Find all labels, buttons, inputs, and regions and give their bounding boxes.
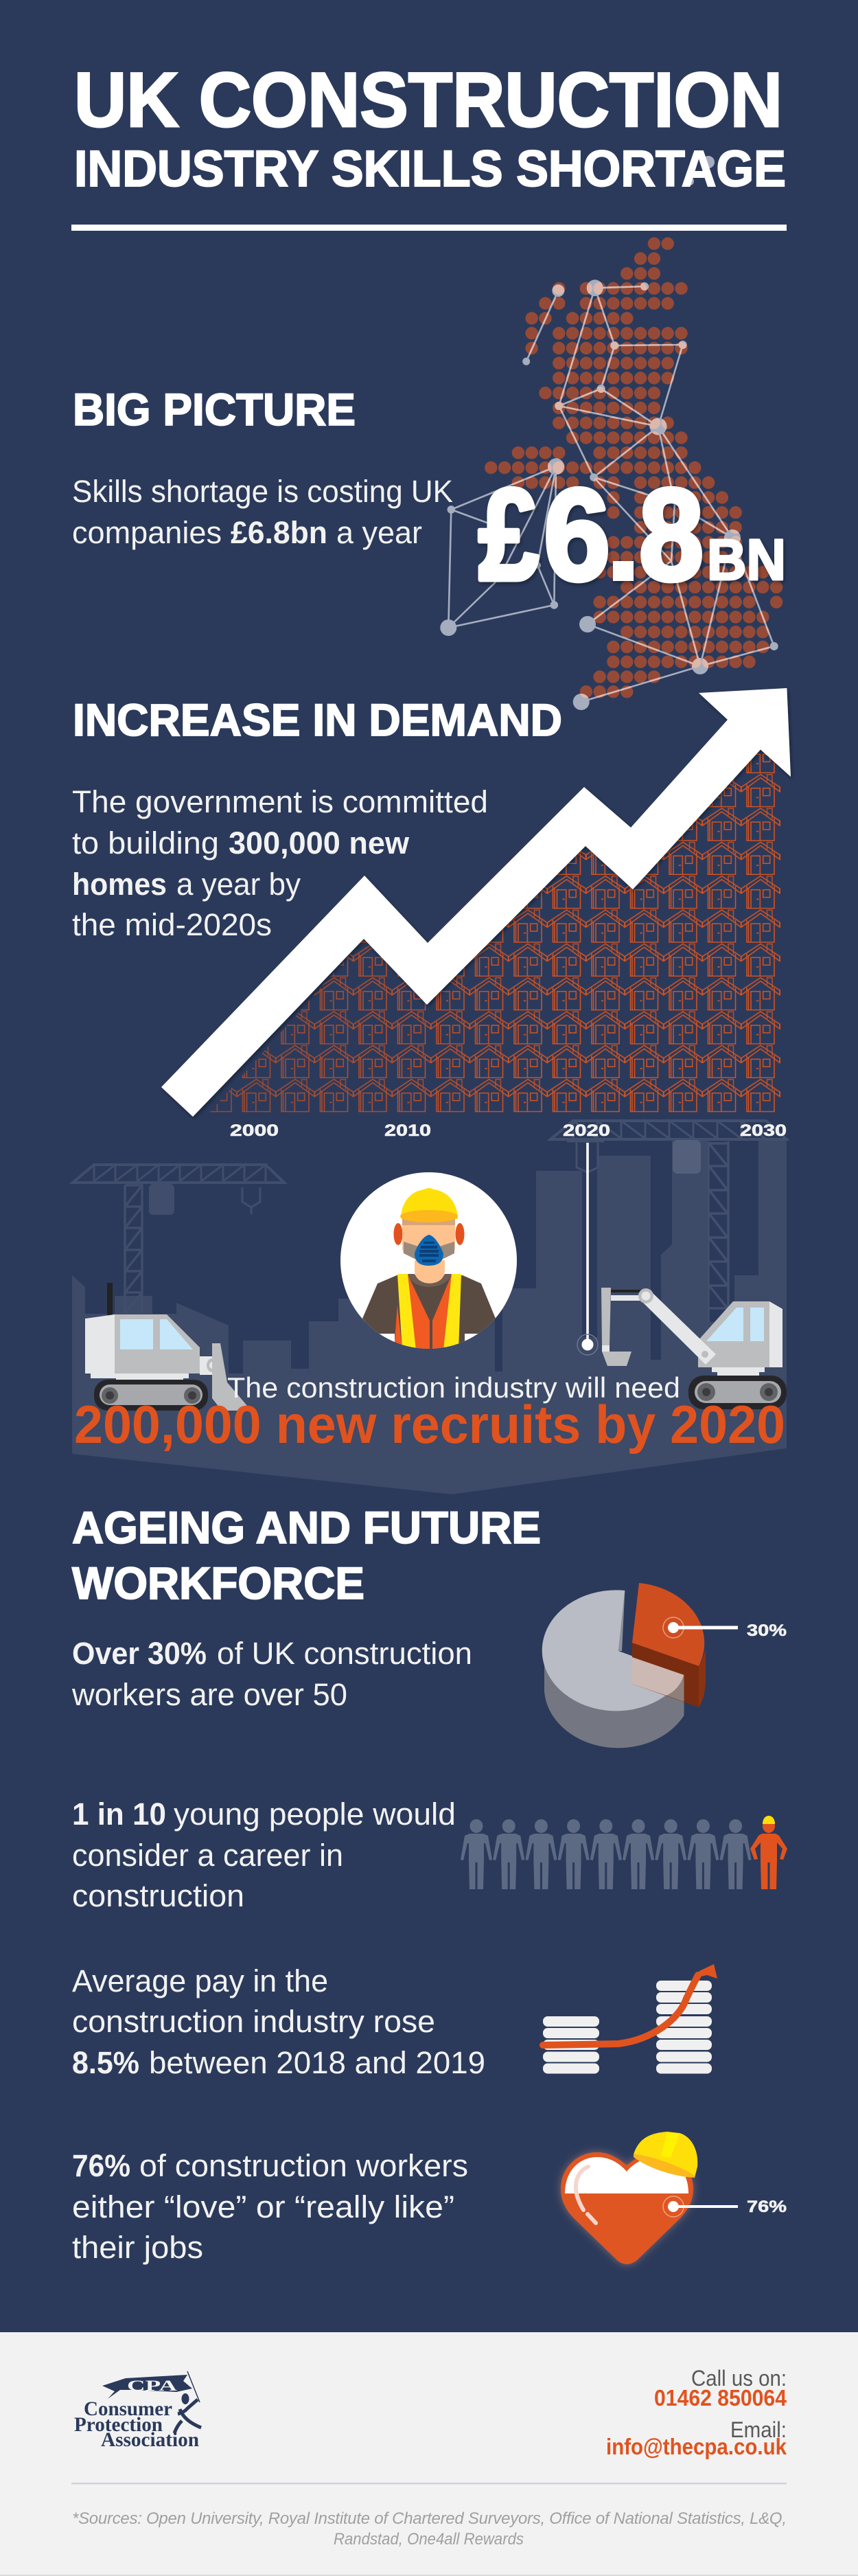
pie orange outer face	[699, 1641, 706, 1707]
rising arrow	[543, 1975, 698, 2045]
chart: houses pattern	[192, 742, 782, 1113]
marker and label	[663, 1617, 787, 1640]
marker and label: 76%	[747, 2198, 787, 2216]
logo: Consumer Protection Association: CPA	[127, 2377, 177, 2394]
logo: Consumer Protection Association	[74, 2371, 201, 2451]
year labels: 2010	[384, 1121, 431, 1140]
contact details: Call us on:	[691, 2366, 787, 2391]
mask	[415, 1235, 443, 1266]
text: over 30 percent	[71, 1636, 472, 1712]
pie side	[544, 1651, 684, 1748]
coin stack: right	[656, 1981, 712, 2074]
text: over 30 percent: Over 30%	[72, 1636, 207, 1671]
year labels: 2000	[230, 1121, 279, 1140]
heading: increase in demand: INCREASE IN DEMAND	[73, 694, 562, 745]
crane cable and ball	[577, 1143, 598, 1355]
year labels: 2020	[563, 1121, 610, 1140]
excavator	[601, 1288, 787, 1409]
text: 1 in 10: young people would	[174, 1797, 456, 1832]
helmet	[401, 1188, 458, 1219]
year labels: 2030	[740, 1121, 787, 1140]
callout text: recruits: 200,000 new recruits by 2020	[74, 1394, 785, 1455]
logo wordmark: Protection	[74, 2413, 163, 2436]
text: average pay	[72, 1963, 485, 2080]
text: big picture: £6.8bn	[231, 515, 327, 550]
big number: 6.8 bn: £	[478, 462, 539, 608]
text: demand: to building	[72, 825, 219, 860]
faint network nodes behind title	[686, 156, 715, 185]
worker portrait	[340, 1172, 517, 1353]
heart fill white	[565, 2157, 688, 2193]
year labels	[230, 1121, 787, 1140]
logo wordmark: Consumer	[84, 2397, 172, 2420]
coin stack: left	[543, 2016, 599, 2074]
network overlap highlight	[512, 282, 769, 698]
logo figure	[187, 2371, 200, 2402]
face	[402, 1219, 455, 1259]
beard	[404, 1242, 454, 1260]
text: demand: homes	[72, 867, 167, 902]
text: over 30 percent: of UK construction	[217, 1636, 472, 1671]
logo wordmark	[74, 2397, 199, 2451]
title: UK CONSTRUCTION	[74, 57, 782, 143]
big number: 6.8 bn	[478, 462, 786, 608]
logo banner	[102, 2375, 192, 2399]
icon: heart with helmet	[561, 2132, 787, 2264]
heart highlight	[576, 2167, 596, 2223]
sources: Randstad, One4all Rewards	[334, 2530, 524, 2549]
pie gray slice	[542, 1590, 684, 1711]
text: 1 in 10: consider a career in	[72, 1838, 343, 1873]
marker and label: 30%	[747, 1621, 787, 1640]
contact details: info@thecpa.co.uk	[606, 2434, 787, 2459]
crane: right	[550, 1121, 787, 1322]
text: big picture: a year	[336, 515, 422, 550]
text: 1 in 10: construction	[72, 1878, 244, 1913]
heading: big picture: BIG PICTURE	[73, 384, 356, 435]
pie overlap	[632, 1657, 684, 1696]
sources: *Sources: Open University, Royal Institute of Chartered Surveyors, Office of National Statistics, L&Q,	[72, 2509, 787, 2528]
skyline and banner	[72, 1140, 787, 1494]
heading: ageing and future workforce: WORKFORCE	[72, 1558, 364, 1608]
title: INDUSTRY SKILLS SHORTAGE	[74, 140, 786, 197]
pie chart	[542, 1583, 787, 1748]
text: 76 percent: either “love” or “really like”	[72, 2189, 454, 2224]
big number: 6.8 bn: 6	[544, 462, 610, 608]
text: demand: The government is committed	[72, 784, 488, 819]
heart	[561, 2152, 693, 2264]
dot map	[491, 244, 777, 692]
title	[74, 57, 786, 197]
big number: 6.8 bn: BN	[707, 527, 786, 592]
text: 76 percent: their jobs	[72, 2230, 203, 2265]
text: over 30 percent: workers are over 50	[71, 1677, 347, 1712]
text: demand: a year by	[176, 867, 301, 902]
footer panel	[0, 2332, 858, 2576]
network lines and nodes	[440, 280, 778, 710]
pie orange top	[632, 1583, 704, 1666]
vest	[408, 1275, 430, 1350]
logo wordmark: Association	[101, 2428, 199, 2451]
neck	[415, 1260, 445, 1284]
text: big picture	[72, 474, 453, 550]
text: 76 percent: of construction workers	[139, 2148, 468, 2183]
big number: 6.8 bn: 8	[639, 462, 704, 608]
pie orange inner face	[632, 1643, 699, 1707]
icon: coins with rising arrow	[543, 1964, 717, 2074]
text: 1 in 10: 1 in 10	[72, 1797, 166, 1832]
text: demand: 300,000 new	[229, 825, 410, 860]
text: 76 percent	[72, 2148, 468, 2265]
icon: row of people	[461, 1816, 787, 1889]
map: UK dot map with network	[440, 156, 778, 710]
marker and label	[663, 2196, 787, 2217]
icon: orange worker	[750, 1816, 787, 1889]
text: average pay: construction industry rose	[72, 2004, 435, 2039]
text: 76 percent: 76%	[72, 2148, 130, 2183]
text: average pay: between 2018 and 2019	[149, 2045, 485, 2080]
title rule	[71, 225, 787, 231]
contact details	[606, 2366, 787, 2459]
footer rule	[71, 2483, 787, 2485]
helmet	[634, 2132, 697, 2178]
text: demand	[72, 784, 488, 942]
text: demand: the mid-2020s	[72, 907, 272, 942]
crane: left	[73, 1165, 284, 1314]
ear muffs	[394, 1223, 402, 1245]
contact details: 01462 850064	[654, 2385, 787, 2410]
contact details: Email:	[730, 2417, 787, 2442]
arrow	[161, 688, 791, 1117]
heading: ageing and future workforce: AGEING AND FUTURE	[72, 1502, 541, 1553]
text: big picture: companies	[72, 515, 222, 550]
sources	[72, 2509, 787, 2549]
text: 1 in 10	[72, 1797, 456, 1913]
text: average pay: Average pay in the	[72, 1963, 328, 1998]
heading: ageing and future workforce	[72, 1502, 541, 1608]
text: average pay: 8.5%	[72, 2045, 139, 2080]
callout text: recruits: The construction industry will need	[227, 1371, 680, 1404]
torso	[362, 1275, 496, 1353]
bulldozer	[85, 1283, 248, 1411]
text: big picture: Skills shortage is costing UK	[72, 474, 453, 509]
